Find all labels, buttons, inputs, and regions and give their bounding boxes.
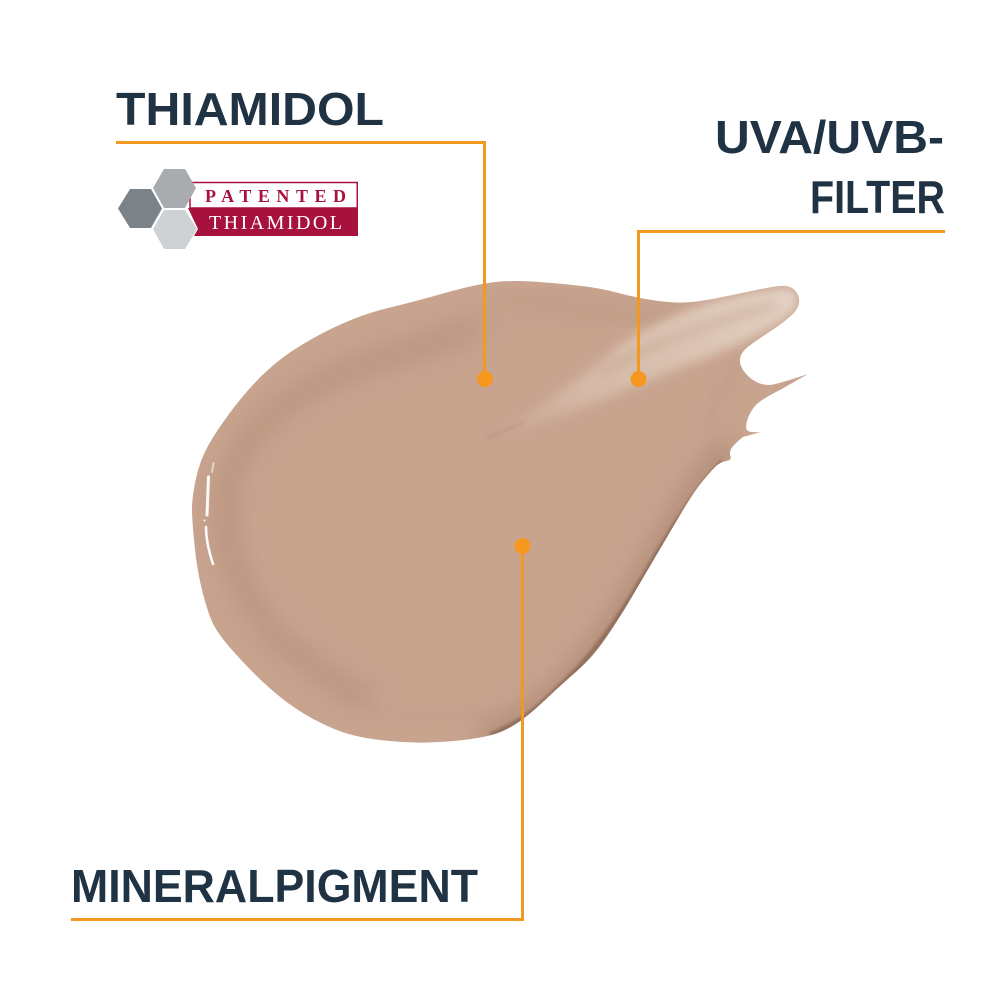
- title: THIAMIDOL: THIAMIDOL: [116, 83, 384, 135]
- label: UVA/UVB-FILTER: [715, 111, 945, 223]
- badge: patented Thiamidol: [118, 169, 358, 249]
- leader line: UVA/UVB-Filter: [630, 232, 945, 387]
- label: UVA/UVB-FILTER: UVA/UVB-: [715, 111, 944, 163]
- badge text: THIAMIDOL: THIAMIDOL: [209, 212, 342, 234]
- leader line: THIAMIDOL: [116, 142, 493, 387]
- badge text: PATENTED: PATENTED: [205, 186, 346, 206]
- cream swatch: [192, 281, 808, 743]
- leader line: Mineralpigment: [71, 538, 530, 920]
- label: MINERALPIGMENT: MINERALPIGMENT: [71, 860, 478, 912]
- label: UVA/UVB-FILTER: FILTER: [810, 171, 945, 223]
- gloss highlight: [204, 463, 214, 564]
- badge hexagons: [118, 169, 197, 249]
- badge box: [188, 182, 358, 236]
